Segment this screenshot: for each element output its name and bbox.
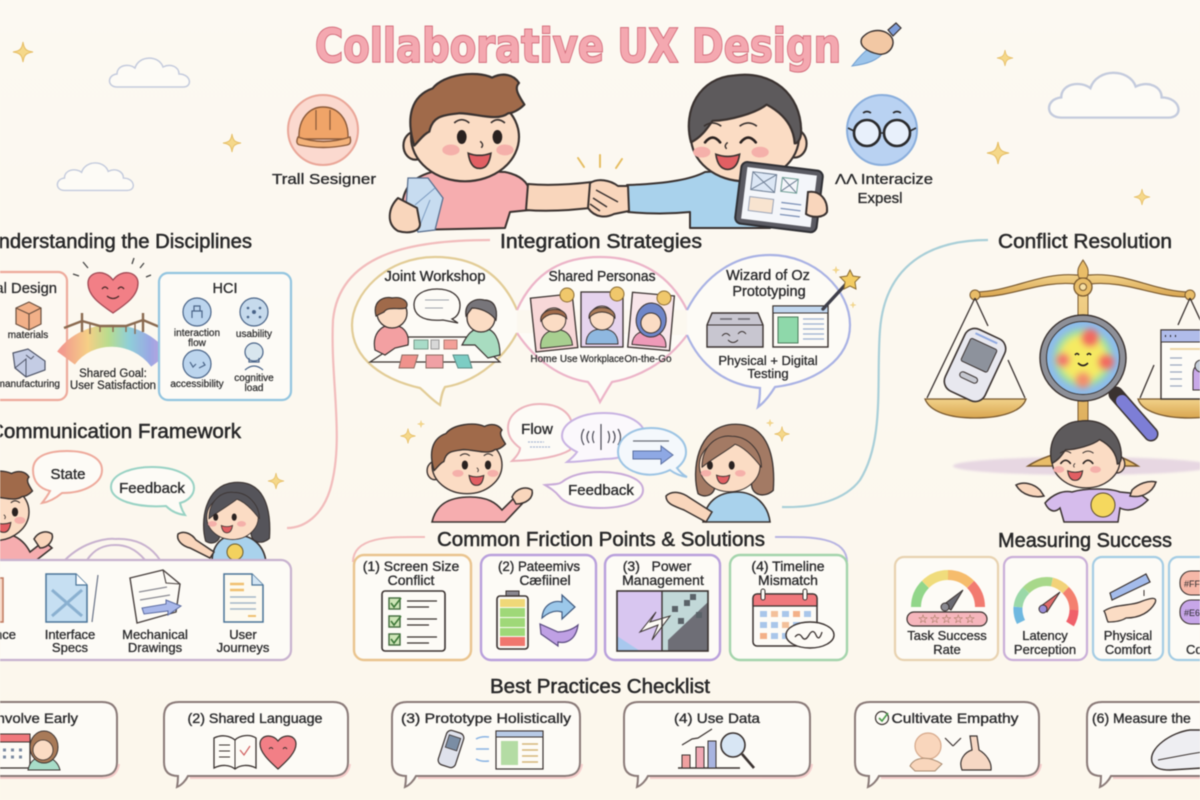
title: Collaborative UX Design	[315, 19, 841, 73]
icon: check circle	[876, 712, 888, 724]
character: dialogue girl	[666, 424, 774, 522]
web page on scale	[1161, 330, 1200, 399]
label: Rate	[933, 642, 961, 657]
checklist bubble 3: prototype holistically	[392, 702, 580, 787]
bubble pink shadow strokes	[0, 764, 1200, 778]
label: Physical	[1104, 628, 1152, 643]
label: interaction flow: flow	[188, 338, 207, 349]
panel heading: HCI	[213, 281, 237, 297]
checklist bubble 4: use data	[624, 702, 810, 787]
magnifier with heatmap	[1040, 315, 1151, 434]
panel: power management	[605, 555, 720, 660]
icon: smiling heart	[73, 258, 151, 313]
persona card: on the go	[628, 292, 674, 351]
icon: manufacturing block	[13, 349, 45, 377]
label: Shared Personas	[548, 269, 656, 285]
right pan	[1138, 399, 1200, 418]
sparkle	[268, 473, 284, 489]
label: Comfort	[1105, 642, 1152, 657]
icon: user journey document	[224, 574, 263, 622]
icon: cognitive load	[245, 343, 263, 370]
bubble: feedback dialogue	[545, 472, 643, 508]
checklist bubble 5: cultivate empathy	[855, 702, 1039, 787]
persona labels: On-the-Go	[624, 354, 672, 365]
icon: sync arrows	[540, 595, 578, 646]
label: Task Success	[907, 628, 987, 643]
checklist bubble 6: measure the impact: (6) Measure the	[1092, 710, 1191, 726]
panel: latency perception	[1004, 557, 1087, 660]
checklist bubble 4: use data: (4) Use Data	[674, 710, 760, 726]
icon: device sketch	[1152, 730, 1200, 770]
scale beam	[975, 275, 1190, 297]
bubble: feedback: Feedback	[119, 480, 185, 497]
label: right expert: ΛΛ Interacize	[835, 171, 933, 188]
illustration: conflict scale	[925, 260, 1200, 522]
bubble: state: State	[50, 466, 86, 483]
label: Prototyping	[732, 284, 806, 300]
icon: sync arrows	[476, 737, 489, 761]
bubble: shared personas	[517, 257, 687, 402]
icon: mechanical drawing	[130, 570, 181, 623]
label: shared goal: User Satisfaction	[70, 380, 156, 392]
panel: power management: (3) Power	[623, 558, 692, 574]
icon: glasses badge	[847, 95, 917, 165]
panel: timeline mismatch: (4) Timeline	[751, 558, 825, 574]
panel: screen size conflict: (1) Screen Size	[363, 558, 459, 574]
panel: screen size conflict: Conflict	[388, 572, 434, 588]
icon: magnifier	[721, 733, 754, 768]
scale base	[1028, 448, 1138, 466]
label: user journeys: User	[229, 627, 257, 642]
connector curve: pink	[287, 240, 490, 528]
label: left designer: Trall Sesigner	[272, 171, 376, 188]
decorative clouds	[57, 58, 1178, 190]
illustration: two designers shaking hands	[390, 74, 827, 233]
icon: calendar	[753, 589, 834, 648]
connector curve: teal to lilac	[782, 240, 988, 507]
label: interaction flow: interaction	[174, 328, 220, 339]
character: dialogue boy	[427, 424, 532, 522]
bracket: friction right	[775, 537, 847, 562]
label: Testing	[747, 366, 789, 381]
label: interface specs: Specs	[52, 640, 89, 655]
bubble: joint workshop	[352, 257, 517, 405]
persona labels: Workplace	[580, 354, 624, 365]
icon: gauge	[916, 575, 980, 611]
handshake	[578, 155, 629, 216]
left pan	[925, 399, 1026, 418]
panel: screen size conflict	[354, 555, 471, 660]
icon: baby and hands	[910, 733, 991, 771]
panel: patterns conflict: (2) Pateemivs	[498, 558, 580, 574]
checklist bubble 6: measure the impact	[1087, 702, 1200, 787]
icon: material cube	[16, 302, 41, 330]
rainbow bridge	[64, 313, 162, 360]
checklist bubble 2: shared language: (2) Shared Language	[188, 710, 323, 726]
scale shadow	[953, 457, 1200, 475]
label: accessibility: accessibility	[170, 379, 224, 390]
bubble: signal wave	[562, 413, 645, 462]
icon: usability	[240, 298, 268, 326]
heading: common friction points: Common Friction Points & Solutions	[437, 529, 765, 551]
label: Latency	[1022, 628, 1068, 643]
illustration: heart over rainbow bridge	[64, 258, 162, 392]
persona card: home use	[530, 294, 578, 352]
bracket: friction left	[353, 537, 425, 562]
label: user journeys: Journeys	[217, 640, 270, 655]
label: mechanical drawings: Mechanical	[122, 627, 188, 642]
bubble: arrow	[618, 428, 687, 477]
label: materials: materials	[8, 330, 48, 341]
icon: sharp versus pixelated screen	[617, 591, 708, 651]
icon: interaction flow	[183, 298, 211, 326]
icon: physical device	[707, 313, 763, 347]
panel: patterns conflict	[481, 555, 596, 660]
persona card: workplace	[581, 292, 623, 347]
icon: open book	[214, 736, 256, 769]
icon: magic wand	[823, 266, 860, 309]
icon: partial document	[0, 578, 3, 622]
icon: battery	[497, 591, 528, 649]
icon: hard hat badge	[288, 95, 358, 165]
label: Cultivate Empathy	[892, 710, 1018, 726]
sparkles beside dialogue	[400, 420, 790, 444]
character: left communicator	[0, 471, 52, 562]
icon: speed gauge	[1018, 581, 1074, 624]
panel: timeline mismatch: Mismatch	[758, 572, 818, 588]
checklist bubble 2: shared language	[164, 702, 348, 787]
icon: digital screen	[773, 306, 828, 347]
character: right communicator	[178, 482, 270, 562]
label: cognitive load: load	[245, 383, 263, 394]
decorative sparkles	[13, 42, 1150, 205]
label: interface specs: Interface	[45, 627, 95, 642]
label: Perception	[1014, 642, 1076, 657]
panel: physical comfort	[1093, 557, 1163, 660]
panel: industrial design	[0, 272, 67, 400]
label: Physical + Digital	[718, 353, 818, 368]
physical device	[941, 325, 1009, 405]
illustration: workshop table	[370, 289, 500, 368]
bubble: wizard of oz	[687, 255, 860, 407]
icon: accessibility	[183, 350, 211, 378]
bubble: state	[33, 451, 102, 503]
left scale strings	[927, 298, 1025, 398]
left designer	[390, 74, 598, 232]
heading: measuring success: Measuring Success	[998, 530, 1172, 552]
heading: best practices checklist: Best Practices Checklist	[490, 676, 710, 698]
character: mediator	[1016, 421, 1156, 522]
right scale strings	[1140, 298, 1200, 398]
icon: checklist	[382, 591, 445, 651]
checklist bubble 3: prototype holistically: (3) Prototype Holistically	[401, 710, 571, 726]
icon: hand holding device	[1104, 574, 1156, 622]
icon: calendar and kid	[0, 731, 60, 770]
panel: shared artifacts	[0, 539, 291, 660]
bubble: flow: Flow	[521, 421, 553, 438]
panel: HCI	[159, 273, 291, 400]
icon: web screen	[496, 731, 543, 769]
icon: interface specs document	[46, 574, 98, 622]
icon: device	[437, 729, 465, 769]
bubble: feedback	[111, 467, 194, 515]
bubble: flow	[508, 404, 572, 461]
star rating pill: ☆☆☆☆☆	[918, 612, 976, 626]
label: mechanical drawings: Drawings	[128, 640, 183, 655]
label: cognitive load: cognitive	[234, 373, 274, 384]
label: right expert: Expesl	[857, 190, 903, 207]
heading: conflict resolution: Conflict Resolution	[998, 231, 1172, 253]
icon: bar chart	[678, 729, 740, 768]
label: shared goal: Shared Goal:	[79, 368, 147, 380]
icon: paint brush	[852, 23, 901, 66]
panel: task success rate	[895, 557, 998, 660]
scale pillar	[1078, 285, 1088, 465]
panel: power management: Management	[622, 572, 704, 588]
icon: heart	[260, 736, 296, 769]
heading: integration strategies: Integration Strategies	[500, 231, 702, 253]
label: Joint Workshop	[384, 269, 486, 285]
persona badges	[560, 287, 671, 305]
persona labels: Home Use	[530, 354, 578, 365]
checklist bubble 1: involve early	[0, 702, 117, 776]
label: usability: usability	[236, 329, 272, 340]
right designer	[627, 75, 827, 233]
panel: color contrast (partial)	[1169, 557, 1200, 660]
panel: timeline mismatch	[730, 555, 847, 660]
hex pills	[1180, 571, 1200, 624]
bubble: feedback dialogue: Feedback	[568, 482, 634, 499]
panel: patterns conflict: Cæfiinel	[519, 572, 571, 588]
label: Wizard of Oz	[726, 268, 810, 284]
